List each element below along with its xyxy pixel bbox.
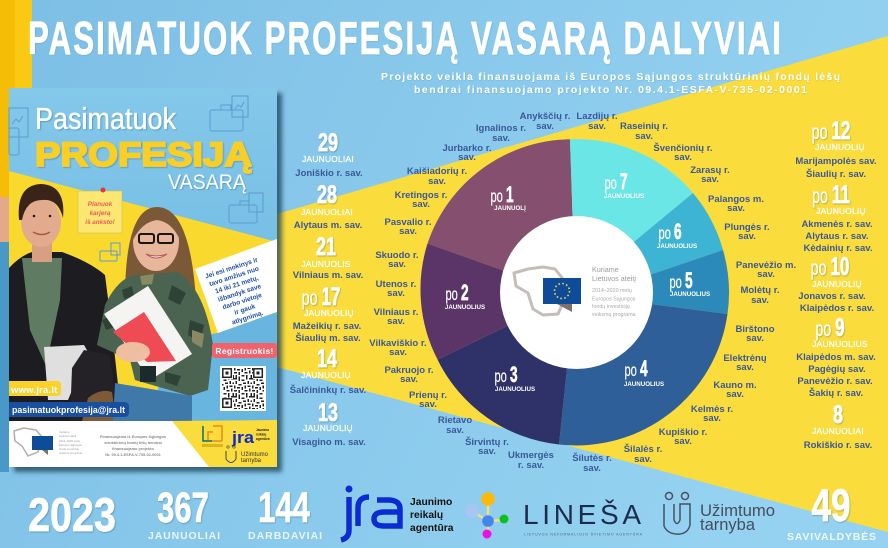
left ranking column: 29 <box>318 128 338 157</box>
girl photo <box>97 207 213 421</box>
right ranking column: Pagėgių sav. <box>808 364 866 375</box>
municipalities around the donut: Kupiškio r. <box>659 427 707 438</box>
centre logo text: veiksmų programa <box>592 312 636 318</box>
subtitle <box>381 71 840 96</box>
logo: Uzimtumo tarnyba: tarnyba <box>700 515 756 534</box>
stat: 367 jaunuoliai: 367 <box>157 483 209 531</box>
centre logo: Lithuania outline <box>514 267 563 315</box>
poster footer funding text: Finansuojama iš Europos Sąjungos <box>100 434 166 439</box>
municipalities around the donut: Vilkaviškio r. <box>369 338 427 349</box>
website pill <box>9 381 61 396</box>
municipalities around the donut: Zarasų r. <box>690 165 730 176</box>
municipalities around the donut: sav. <box>738 231 756 242</box>
poster footer partner logos: Jaunimo <box>256 428 269 432</box>
municipalities around the donut: sav. <box>458 152 476 163</box>
poster note text: 14 iki 21 metų, <box>214 275 260 295</box>
donut labels <box>445 169 710 393</box>
right ranking column: Kėdainių r. sav. <box>804 243 872 254</box>
left ranking column: Visagino m. sav. <box>292 437 366 448</box>
poster yellow diagonal <box>9 171 277 421</box>
poster note text: Jei esi mokinys ir <box>204 257 259 280</box>
municipalities around the donut: Prienų r. <box>409 390 447 401</box>
stat: 144 darbdaviai: 144 <box>258 483 310 531</box>
right ranking column: Šakių r. sav. <box>809 387 863 399</box>
subtitle: Projekto veikla finansuojama iš Europos Sąjungos struktūrinių fondų lėšų <box>381 71 840 83</box>
poster footer EU logo <box>14 428 82 456</box>
municipalities around the donut: Plungės r. <box>724 222 770 233</box>
poster heading: VASARĄ <box>168 171 247 194</box>
municipalities around the donut: sav. <box>588 121 606 132</box>
donut labels: JAUNUOLIUS <box>604 193 644 200</box>
municipalities around the donut: sav. <box>478 446 496 457</box>
left ranking column: JAUNUOLIŲ <box>301 370 351 380</box>
poster footer <box>9 420 277 467</box>
municipalities around the donut: Rietavo <box>438 415 472 426</box>
left ranking column: JAUNUOLIŲ <box>303 423 353 433</box>
municipalities around the donut: Kauno m. <box>713 380 757 391</box>
municipalities around the donut: sav. <box>446 425 464 436</box>
panel: poster <box>9 88 277 467</box>
municipalities around the donut: sav. <box>701 174 719 185</box>
right ranking column: JAUNUOLIŲ <box>815 142 865 152</box>
centre logo text: Kuriame <box>592 265 619 274</box>
municipalities around the donut: Panevėžio m. <box>736 260 796 271</box>
municipalities around the donut: Anykščių r. <box>520 111 570 122</box>
centre logo text <box>592 265 636 318</box>
municipalities around the donut: sav. <box>757 269 775 280</box>
poster footer partner logos: tarnyba <box>241 458 262 464</box>
poster footer partner logos: jra <box>231 428 255 447</box>
logo text: LINESA: LINEŠA <box>523 499 641 530</box>
left ranking column: JAUNUOLIAI <box>302 154 354 164</box>
municipalities around the donut: Širvintų r. <box>465 436 509 448</box>
segment: po 6 <box>600 193 723 285</box>
segment: po 4 <box>559 300 728 445</box>
sticky note: iš anksto! <box>85 219 115 226</box>
right ranking column: 8 <box>833 400 843 429</box>
right ranking column: JAUNUOLIUS <box>812 339 868 349</box>
municipalities around the donut: sav. <box>736 362 754 373</box>
right ranking column: JAUNUOLIAI <box>812 426 864 436</box>
poster heading: Pasimatuok <box>35 101 176 136</box>
municipalities around the donut: sav. <box>536 121 554 132</box>
registration button: Registruokis! <box>215 346 274 356</box>
poster decorative icons <box>9 96 263 261</box>
municipalities around the donut: sav. <box>674 436 692 447</box>
poster note text: tavo amžius nuo <box>209 266 260 288</box>
poster footer partner logos: agentūra <box>256 437 270 441</box>
municipalities around the donut: sav. <box>727 203 745 214</box>
boy photo <box>9 184 122 421</box>
poster note text: darbo vietoje <box>222 292 263 311</box>
left ranking column: 14 <box>317 344 337 373</box>
logo text: JRA: Jaunimo <box>410 497 452 508</box>
municipalities around the donut: sav. <box>387 288 405 299</box>
municipalities around the donut: Elektrėnų <box>723 353 767 364</box>
municipalities around the donut: sav. <box>726 389 744 400</box>
municipalities around the donut: Ukmergės <box>508 450 554 461</box>
donut labels: po 7 <box>604 169 628 194</box>
segment: po 7 <box>570 139 693 270</box>
municipalities around the donut: Šilutės r. <box>572 452 612 464</box>
right ranking column: Panevėžio r. sav. <box>797 376 873 387</box>
stat: 49 savivaldybes <box>787 480 876 543</box>
municipalities around the donut: sav. <box>399 226 417 237</box>
stat: 367 jaunuoliai <box>148 483 220 542</box>
left ranking column: Šiaulių m. sav. <box>295 332 361 344</box>
right ranking column: Alytaus r. sav. <box>805 231 869 242</box>
municipalities around the donut: sav. <box>746 333 764 344</box>
municipalities around the donut <box>369 111 796 474</box>
municipalities around the donut: sav. <box>635 131 653 142</box>
municipalities around the donut: sav. <box>387 316 405 327</box>
municipalities around the donut: sav. <box>400 374 418 385</box>
right ranking column: po 11 <box>812 181 850 209</box>
centre logo: EU flag <box>543 278 581 312</box>
left ranking column: JAUNUOLIAI <box>301 207 353 217</box>
poster heading <box>35 101 252 194</box>
centre logo text: fondų investicijų <box>592 304 630 310</box>
poster footer partner logos <box>202 426 270 464</box>
municipalities around the donut: sav. <box>703 413 721 424</box>
poster footer EU logo: 2014–2020 metų <box>59 439 80 443</box>
poster footer funding text: Nr. 09.4.1-ESFA-V-735-02-0001 <box>105 452 162 457</box>
poster footer funding text: struktūrinių fondų lėšų bendrai <box>104 440 162 445</box>
poster footer EU logo: fondų investicijų <box>59 447 79 451</box>
municipalities around the donut: Jurbarko r. <box>442 143 492 154</box>
stat: 2023: 2023 <box>28 490 116 542</box>
right ranking column: JAUNUOLIŲ <box>812 279 862 289</box>
sticky note: karjerą <box>90 210 111 217</box>
right ranking column: po 9 <box>815 314 845 342</box>
segment: po 1 <box>428 139 573 280</box>
right ranking column: Marijampolės sav. <box>795 156 877 167</box>
stat: 49 savivaldybes: SAVIVALDYBĖS <box>787 530 876 543</box>
poster footer EU logo: Europos Sąjungos <box>59 443 82 447</box>
donut centre <box>500 216 653 369</box>
municipalities around the donut: Molėtų r. <box>740 285 780 296</box>
municipalities around the donut: sav. <box>634 454 652 465</box>
poster footer EU logo: Lietuvos ateitį <box>59 434 76 438</box>
email pill <box>9 402 129 417</box>
municipalities around the donut: Palangos m. <box>708 194 764 205</box>
logo text: JRA: reikalų <box>410 510 443 521</box>
municipalities around the donut: sav. <box>492 133 510 144</box>
municipalities around the donut: sav. <box>419 399 437 410</box>
stat: 49 savivaldybes: 49 <box>811 480 851 531</box>
municipalities around the donut: Švenčionių r. <box>653 142 713 154</box>
donut labels: JAUNUOLIUS <box>495 386 535 393</box>
centre logo text: Europos Sąjungos <box>592 296 636 302</box>
municipalities around the donut: sav. <box>389 347 407 358</box>
poster footer EU logo: Kuriame <box>59 430 70 434</box>
donut labels: JAUNUOLIUS <box>445 304 485 311</box>
left ranking column: 21 <box>316 232 336 261</box>
right ranking column: Jonavos r. sav. <box>798 291 866 302</box>
poster note text: ir gauk <box>234 303 257 317</box>
segment: po 3 <box>438 315 570 444</box>
left ranking column: Šalčininkų r. sav. <box>290 384 366 396</box>
left ranking column: JAUNUOLIŲ <box>304 308 354 318</box>
left yellow stripe <box>0 0 32 472</box>
municipalities around the donut: Kretingos r. <box>395 190 447 201</box>
poster note text: atlygnimą. <box>231 310 264 327</box>
left ranking column: 13 <box>318 398 338 427</box>
municipalities around the donut: Kaišiadorių r. <box>407 166 467 177</box>
email pill: pasimatuokprofesija@jra.lt <box>12 405 125 415</box>
poster footer partner logos: Užimtumo <box>241 452 269 458</box>
centre logo text: Lietuvos ateitį <box>592 274 636 283</box>
stat: 144 darbdaviai <box>248 483 322 542</box>
donut labels: po 1 <box>490 182 514 207</box>
segment: po 5 <box>620 250 729 314</box>
donut labels: po 3 <box>494 362 518 387</box>
donut labels: po 4 <box>624 356 648 381</box>
municipalities around the donut: Vilniaus r. <box>374 307 418 318</box>
left ranking column: Vilniaus m. sav. <box>293 270 363 281</box>
municipalities around the donut: Lazdijų r. <box>576 111 618 122</box>
stat: 144 darbdaviai: DARBDAVIAI <box>248 530 322 542</box>
poster footer partner logos: reikalų <box>256 432 266 436</box>
logo: JRA <box>341 486 454 540</box>
donut labels: po 6 <box>658 219 682 244</box>
stat: 367 jaunuoliai: JAUNUOLIAI <box>148 530 220 542</box>
right ranking column: Rokiškio r. sav. <box>804 440 872 451</box>
donut chart <box>420 139 729 445</box>
segment: po 2 <box>420 244 530 360</box>
qr code <box>220 366 266 411</box>
municipalities around the donut: Šilalės r. <box>624 443 662 455</box>
left ranking column: JAUNUOLIS <box>301 259 351 269</box>
logo: Uzimtumo tarnyba <box>664 492 775 534</box>
right ranking column <box>795 117 877 451</box>
municipalities around the donut: Pakruojo r. <box>384 365 434 376</box>
poster white note panel <box>195 239 277 333</box>
left ranking column: Joniškio r. sav. <box>295 168 363 179</box>
logo text: LINESA: LIETUVOS NEFORMALIOJO ŠVIETIMO AGENTŪRA <box>524 532 643 536</box>
municipalities around the donut: sav. <box>388 259 406 270</box>
left ranking column: 28 <box>317 180 337 209</box>
right ranking column: Klaipėdos r. sav. <box>800 303 874 314</box>
left ranking column <box>290 128 366 448</box>
registration button <box>212 343 277 358</box>
right ranking column: Klaipėdos m. sav. <box>796 352 876 363</box>
centre logo text: 2014–2020 metų <box>592 288 632 294</box>
logo text: JRA: agentūra <box>410 523 454 534</box>
sticky note: Planuok <box>88 201 113 208</box>
municipalities around the donut: Skuodo r. <box>375 250 419 261</box>
poster note text <box>204 257 275 330</box>
donut labels: JAUNUOLĮ <box>494 205 526 212</box>
municipalities around the donut: sav. <box>412 199 430 210</box>
donut labels: po 2 <box>445 280 469 305</box>
poster heading: PROFESIJĄ <box>35 136 252 174</box>
logo text: JRA <box>410 497 454 534</box>
municipalities around the donut: Ignalinos r. <box>476 123 526 134</box>
poster footer funding text: finansuojamo projekto <box>112 446 154 451</box>
logo: Uzimtumo tarnyba: Užimtumo <box>700 501 775 520</box>
left ranking column: po 17 <box>302 283 340 311</box>
left ranking column: Alytaus m. sav. <box>294 220 362 231</box>
poster note text: išbandyk save <box>217 283 262 304</box>
municipalities around the donut: Birštono <box>735 324 775 335</box>
municipalities around the donut: Raseinių r. <box>620 121 668 132</box>
subtitle: bendrai finansuojamo projekto Nr. 09.4.1-ESFA-V-735-02-0001 <box>414 84 807 96</box>
sticky note <box>78 188 122 233</box>
donut labels: JAUNUOLIUS <box>624 381 664 388</box>
right ranking column: po 10 <box>811 253 849 281</box>
municipalities around the donut: sav. <box>428 176 446 187</box>
left ranking column: Mažeikių r. sav. <box>293 321 361 332</box>
donut labels: po 5 <box>669 268 693 293</box>
yellow diagonal band <box>277 36 888 532</box>
municipalities around the donut: Utenos r. <box>376 279 416 290</box>
right ranking column: Akmenės r. sav. <box>801 219 873 230</box>
donut labels: JAUNUOLIUS <box>657 243 697 250</box>
municipalities around the donut: sav. <box>674 152 692 163</box>
poster footer EU logo: veiksmų programa <box>59 451 82 455</box>
right ranking column: po 12 <box>812 117 850 145</box>
municipalities around the donut: r. sav. <box>518 460 544 471</box>
municipalities around the donut: Kelmės r. <box>691 404 733 415</box>
right ranking column: JAUNUOLIŲ <box>816 206 866 216</box>
municipalities around the donut: Pasvalio r. <box>384 217 432 228</box>
poster lower right blue <box>150 312 277 421</box>
poster footer funding text <box>100 434 166 457</box>
logo: LINESA dots <box>465 492 508 538</box>
municipalities around the donut: sav. <box>751 295 769 306</box>
donut labels: JAUNUOLIUS <box>670 291 710 298</box>
right ranking column: Šiaulių r. sav. <box>806 168 866 180</box>
municipalities around the donut: sav. <box>583 463 601 474</box>
website pill: www.jra.lt <box>10 385 58 396</box>
